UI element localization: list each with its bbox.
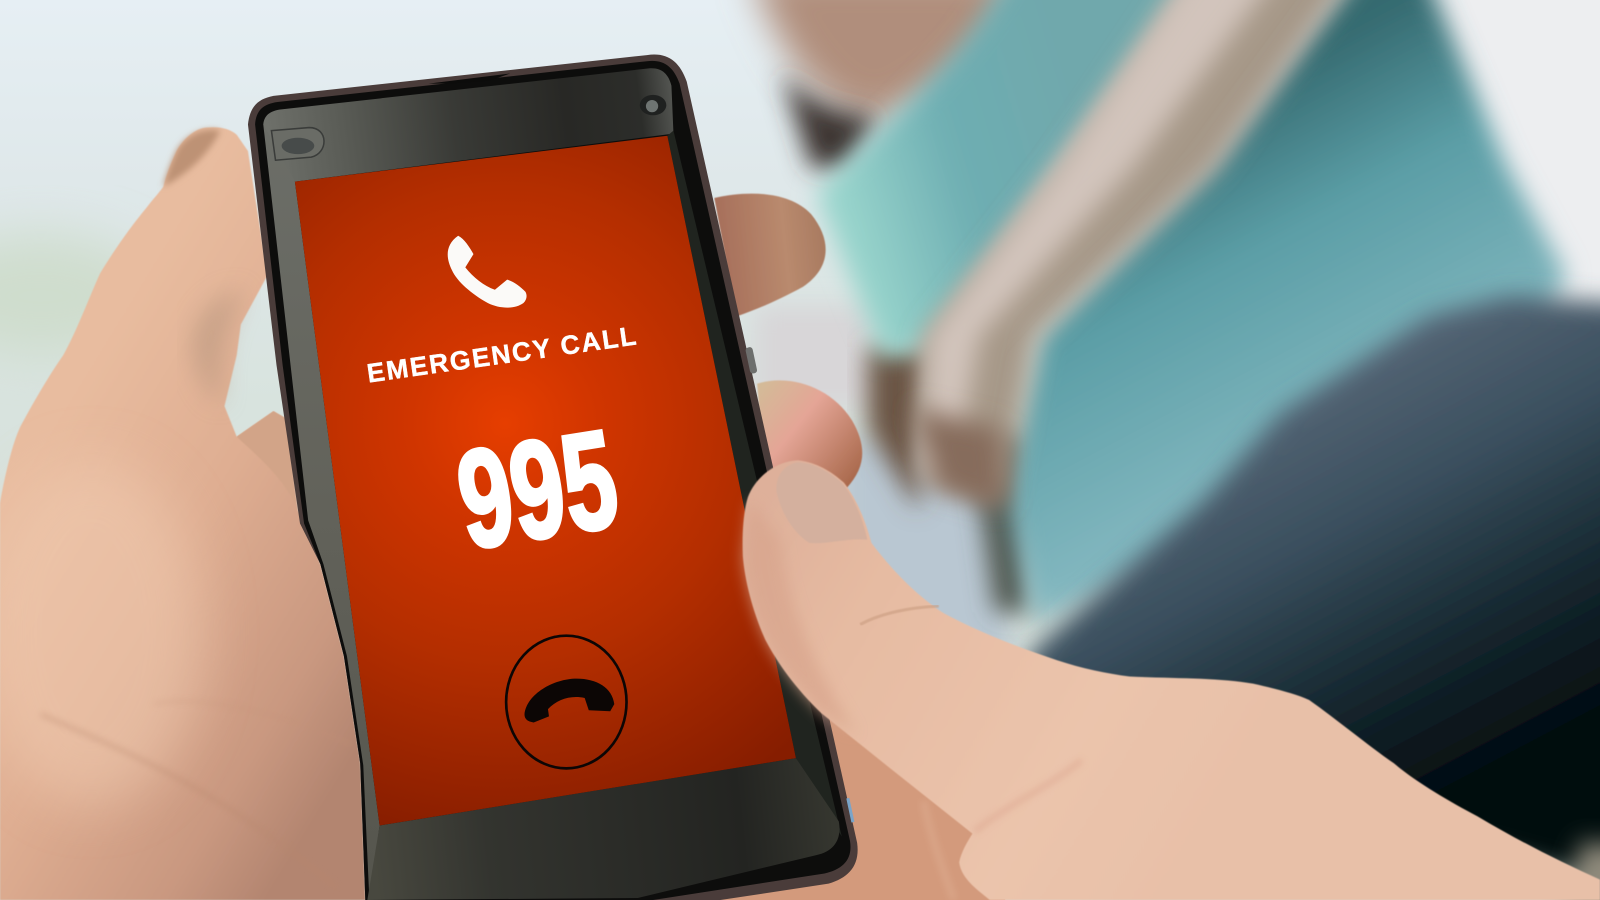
blurred face [750,0,1020,120]
side button [745,347,758,374]
shadow under shirt [867,347,934,510]
finger: back lower finger [757,380,862,488]
blue edge sliver [846,798,854,823]
phone glass bottom [367,758,839,900]
blurred hair shadow [781,71,878,168]
palm behind phone [714,673,1020,900]
knuckle crease [860,606,939,624]
phone [248,55,858,900]
blurred shirt left band [816,0,1214,357]
phone black bezel [255,61,851,900]
blurred shirt stripe [918,0,1357,500]
thumbnail [776,462,867,543]
blurred dark trousers [1020,296,1600,898]
green tint left [0,235,153,357]
second finger part [237,411,296,505]
phone glass top [263,68,673,182]
left hand [0,127,365,900]
front camera [640,95,666,115]
screen [295,136,796,826]
glass left strip [263,124,380,900]
label: emergency call: EMERGENCY CALL [365,321,638,389]
palm highlight [0,459,204,806]
icon: end call button [506,636,627,768]
finger knuckle shadow [193,291,245,406]
thumb edge shading [743,500,857,735]
icon: white phone handset [448,236,527,308]
fingernail shade [163,130,220,187]
speaker [271,128,324,160]
glass right strip [667,131,842,837]
number: 995: 995 [448,401,627,579]
phone body [248,55,858,900]
finger: back upper finger [714,194,826,316]
right thumb [743,460,1600,900]
hand crease [974,760,1082,832]
bottom right corner [1561,842,1600,900]
palm crease [41,714,337,888]
palm fold [923,801,954,900]
blurred shirt main body [1005,0,1566,622]
